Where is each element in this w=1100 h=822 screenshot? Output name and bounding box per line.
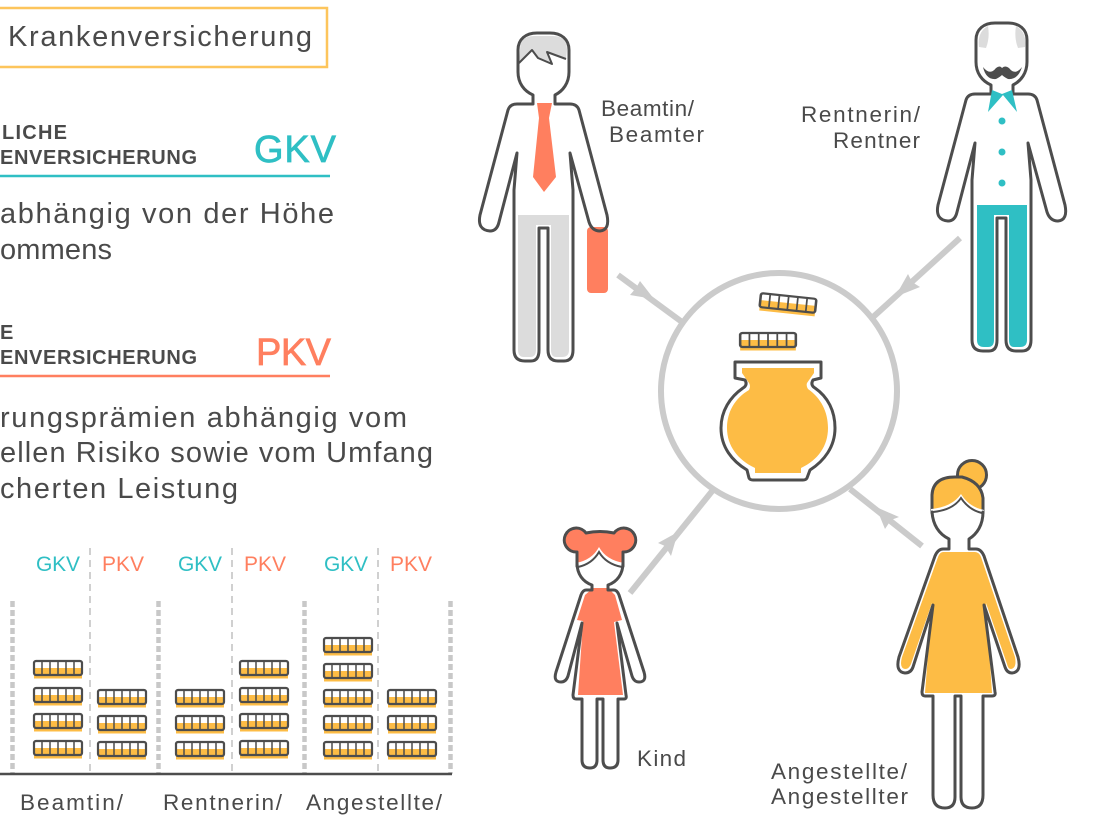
heading: gesetzliche Krankenversicherung: LICHE: [2, 122, 67, 144]
column labels: PKV: [390, 553, 432, 576]
group labels: [20, 790, 443, 815]
label: Angestellte/Angestellter: Angestellter: [771, 784, 908, 809]
GKV description: abhängig von der Höhe: [0, 198, 334, 230]
column labels: GKV: [36, 553, 80, 576]
GKV description: [0, 198, 334, 266]
moustache: [983, 66, 1022, 79]
heading: private Krankenversicherung: ENVERSICHERUNG: [0, 347, 197, 369]
column labels: GKV: [178, 553, 222, 576]
group labels: Rentnerin/: [163, 790, 283, 815]
label: Angestellte/Angestellter: Angestellte/: [771, 759, 908, 784]
title box: Krankenversicherung: [8, 21, 312, 53]
heading: gesetzliche Krankenversicherung: [0, 122, 197, 169]
column labels: PKV: [102, 553, 144, 576]
figure: Beamtin/Beamter: [479, 33, 608, 361]
hair: [564, 528, 636, 566]
hair: [519, 36, 567, 64]
bow tie: [988, 90, 1017, 112]
trousers: [518, 215, 569, 357]
heading: private Krankenversicherung: [0, 322, 197, 369]
GKV description: ommens: [0, 234, 112, 266]
section: PKV: [0, 322, 433, 505]
PKV description: cherten Leistung: [0, 473, 238, 505]
heading: private Krankenversicherung: E: [0, 322, 13, 344]
dress: [901, 552, 1016, 693]
label: Angestellte/Angestellter: [771, 759, 908, 809]
falling coin: [759, 293, 816, 316]
column labels: GKV: [324, 553, 368, 576]
label: Beamtin/Beamter: Beamter: [609, 122, 704, 147]
side hair: [979, 26, 1025, 48]
bun: [958, 460, 986, 490]
outline: [479, 33, 608, 361]
figure: Angestellte/Angestellter: [898, 460, 1019, 808]
section: GKV: [0, 122, 337, 266]
PKV description: rungsprämien abhängig vom: [0, 402, 407, 434]
tie: [533, 103, 556, 192]
PKV description: [0, 402, 433, 505]
dress: [577, 588, 623, 695]
group labels: Beamtin/: [20, 790, 124, 815]
arrow: Angestellte to jar: [850, 489, 922, 546]
arrow: Kind to jar: [630, 490, 713, 593]
title box: [0, 8, 327, 67]
GKV abbreviation: GKV: [254, 129, 337, 171]
coin: [740, 333, 796, 350]
PKV description: ellen Risiko sowie vom Umfang: [0, 437, 433, 469]
column labels: PKV: [244, 553, 286, 576]
trousers: [977, 205, 1027, 347]
label: Rentnerin/Rentner: Rentner: [833, 128, 920, 153]
figure: Rentnerin/Rentner: [937, 23, 1066, 351]
jar: [721, 362, 835, 480]
figure: Kind: [555, 528, 645, 768]
hair: [932, 477, 983, 512]
buttons: [998, 118, 1006, 186]
briefcase: [587, 227, 608, 293]
coin stacks: [34, 638, 436, 760]
label: Kind: Kind: [637, 746, 686, 771]
arrow: Rentner to jar: [872, 238, 960, 318]
outline: [937, 23, 1066, 351]
group labels: Angestellte/: [306, 790, 443, 815]
column labels: [36, 553, 432, 576]
label: Beamtin/Beamter: Beamtin/: [601, 96, 695, 121]
outline: [555, 563, 645, 768]
label: Rentnerin/Rentner: Rentnerin/: [801, 102, 921, 127]
PKV abbreviation: PKV: [256, 332, 332, 374]
label: Rentnerin/Rentner: [801, 102, 921, 153]
outline: [898, 512, 1019, 808]
chart: contributions by group: [0, 548, 452, 815]
circle: jar with coins: [661, 273, 897, 509]
arrow: Beamter to jar: [618, 275, 682, 322]
label: Beamtin/Beamter: [601, 96, 704, 147]
heading: gesetzliche Krankenversicherung: ENVERSICHERUNG: [0, 147, 197, 169]
